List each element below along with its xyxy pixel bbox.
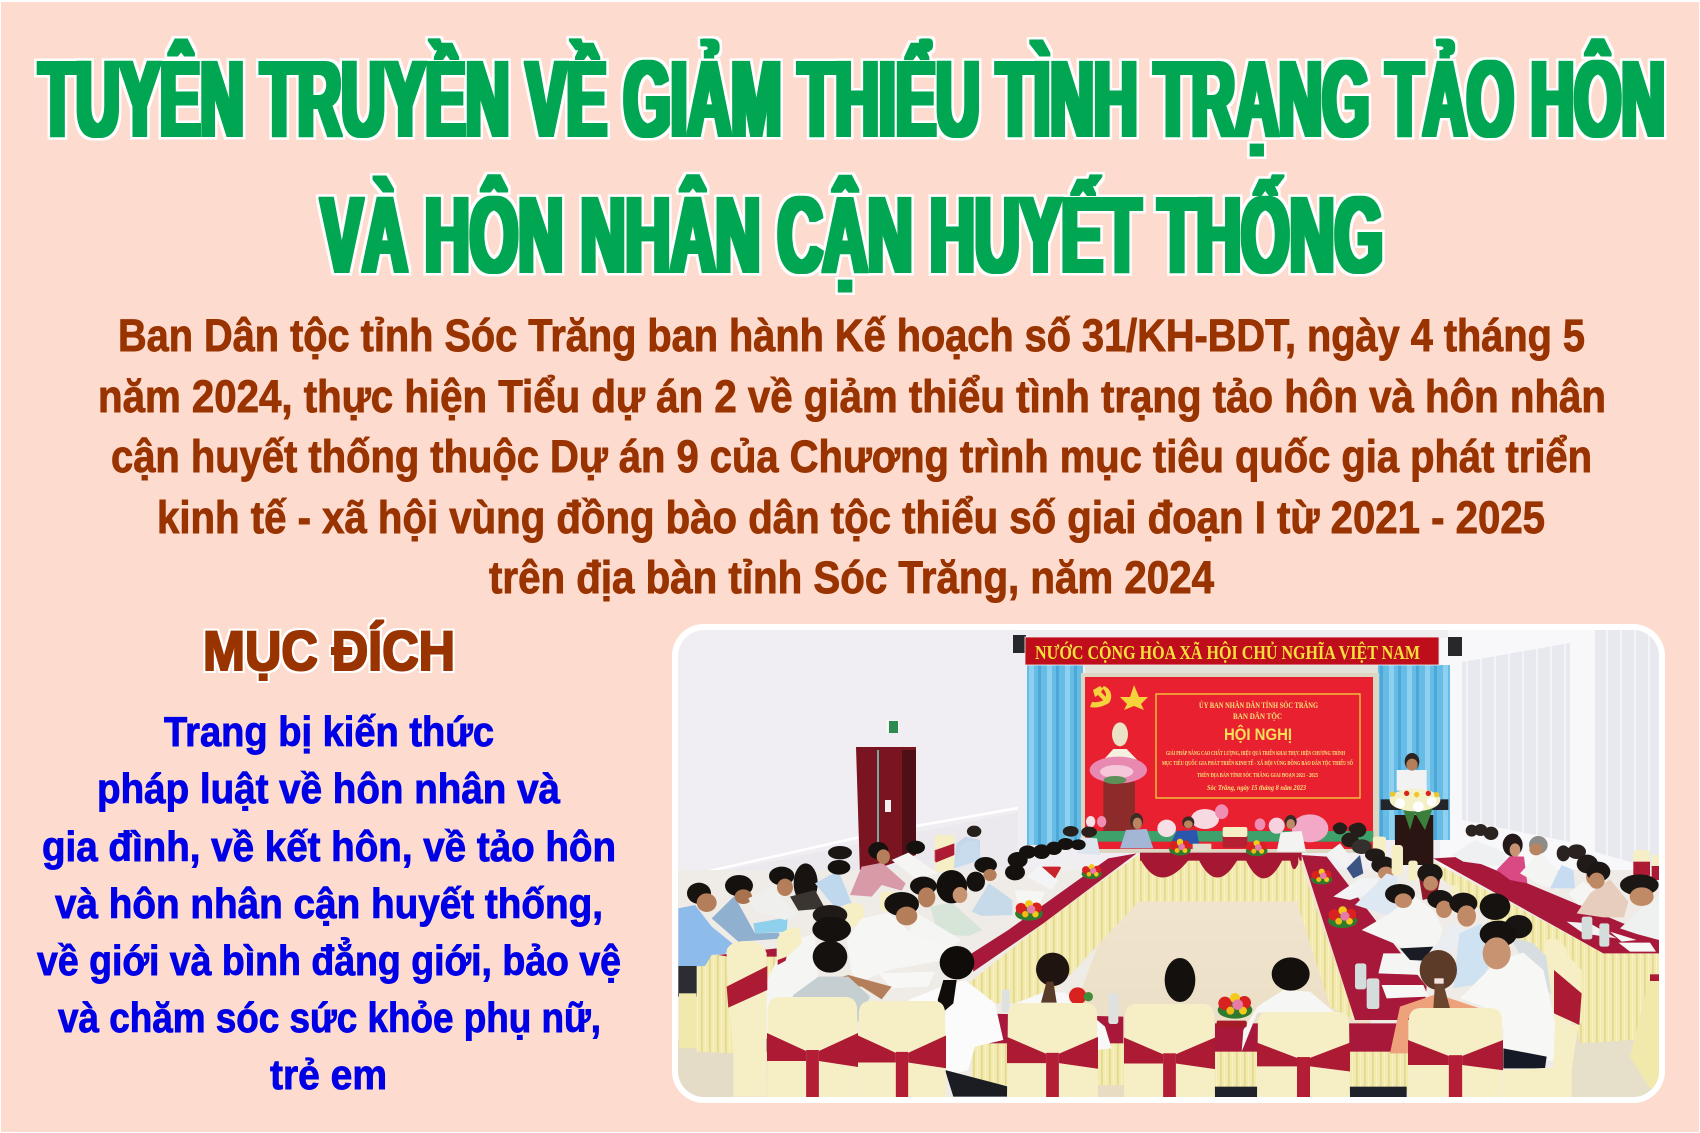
conference screen (1081, 673, 1379, 853)
portrait bust, flowers and lotus on screen (1086, 722, 1373, 842)
floor (678, 860, 1660, 1100)
conference screen: BAN DÂN TỘC (1233, 711, 1282, 721)
purpose text: và chăm sóc sức khỏe phụ nữ, (58, 994, 601, 1041)
intro paragraph: kinh tế - xã hội vùng đồng bào dân tộc thiểu số giai đoạn I từ 2021 - 2025 (157, 492, 1545, 543)
front row chairs (767, 997, 1503, 1097)
heading: purpose: MỤC ĐÍCH (203, 619, 455, 682)
purpose text: Trang bị kiến thức (164, 708, 494, 755)
national motto banner (1025, 637, 1439, 665)
lectern with speaker (1381, 753, 1448, 865)
purpose text: và hôn nhân cận huyết thống, (55, 880, 603, 927)
purpose text (37, 708, 621, 1098)
national motto banner: NƯỚC CỘNG HÒA XÃ HỘI CHỦ NGHĨA VIỆT NAM (1035, 640, 1420, 664)
purpose text: về giới và bình đẳng giới, bảo vệ (37, 935, 621, 984)
purpose text: gia đình, về kết hôn, về tảo hôn (42, 823, 616, 870)
purpose text: trẻ em (270, 1051, 387, 1098)
conference screen: Sóc Trăng, ngày 15 tháng 8 năm 2023 (1207, 783, 1306, 792)
purpose text: pháp luật về hôn nhân và (97, 765, 561, 812)
room walls and door (709, 630, 1659, 870)
conference screen: MỤC TIÊU QUỐC GIA PHÁT TRIỂN KINH TẾ - XÃ HỘI VÙNG ĐỒNG BÀO DÂN TỘC THIỂU SỐ (1162, 759, 1353, 767)
conference screen: HỘI NGHỊ (1224, 725, 1292, 744)
title (39, 38, 1665, 295)
conference screen: TRÊN ĐỊA BÀN TỈNH SÓC TRĂNG GIAI ĐOẠN 2021 - 2025 (1197, 771, 1319, 779)
photo: conference meeting room (672, 624, 1665, 1103)
far-row delegates (935, 823, 1402, 872)
intro paragraph (98, 310, 1606, 603)
conference screen: ỦY BAN NHÂN DÂN TỈNH SÓC TRĂNG (1199, 700, 1318, 710)
officials at head table (1120, 813, 1306, 856)
intro paragraph: trên địa bàn tỉnh Sóc Trăng, năm 2024 (489, 552, 1214, 603)
tables (697, 850, 1659, 1098)
conference screen: GIẢI PHÁP NÂNG CAO CHẤT LƯỢNG, HIỆU QUẢ TRIỂN KHAI THỰC HIỆN CHƯƠNG TRÌNH (1166, 749, 1345, 757)
left-side delegates (678, 838, 1112, 1097)
right-side delegates (1165, 822, 1659, 1098)
